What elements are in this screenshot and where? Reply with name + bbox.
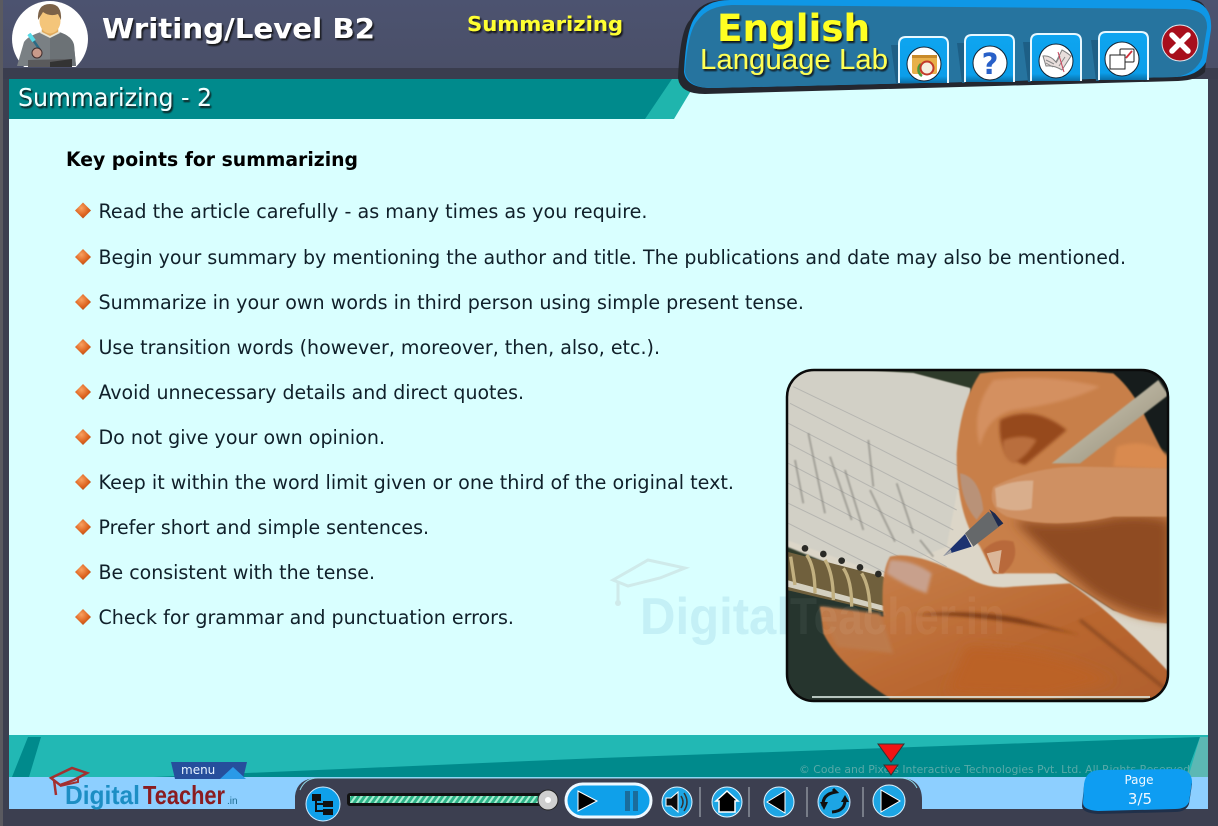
icon: help tab: ? bbox=[982, 47, 998, 81]
section title text: Summarizing - 2 bbox=[18, 83, 212, 112]
panel: English Language Lab bbox=[678, 0, 1211, 94]
content panel bbox=[9, 79, 1208, 735]
logo: Digital Teacher: Digital bbox=[65, 780, 140, 810]
list item 8: Prefer short and simple sentences. bbox=[98, 516, 429, 539]
icon: home button bbox=[712, 787, 742, 817]
list item 7: Keep it within the word limit given or one third of the original text. bbox=[98, 471, 734, 494]
header title: Writing/Level B2 bbox=[102, 12, 375, 45]
icon: next button bbox=[873, 785, 905, 817]
lower hand bbox=[820, 555, 1170, 698]
footer band bbox=[9, 735, 1208, 809]
list item 6: Do not give your own opinion. bbox=[98, 426, 385, 449]
icon: help tab bbox=[957, 35, 1014, 83]
control bar bbox=[295, 778, 922, 826]
pen bbox=[1052, 380, 1168, 463]
thumb bbox=[992, 467, 1170, 523]
icon: close button bbox=[1162, 25, 1198, 61]
key points list bbox=[75, 200, 1126, 629]
upper hand bbox=[957, 370, 1170, 623]
icon: speaker button bbox=[662, 787, 692, 817]
page indicator: Page bbox=[1124, 773, 1154, 787]
icon: open book tab bbox=[1023, 34, 1081, 82]
list item 1: Read the article carefully - as many times as you require. bbox=[98, 200, 648, 223]
icon: window resize tab bbox=[1091, 32, 1148, 81]
list item 4: Use transition words (however, moreover, then, also, etc.). bbox=[98, 336, 660, 359]
watermark bbox=[613, 560, 790, 646]
key points heading: Key points for summarizing bbox=[66, 148, 358, 171]
play and pause button bbox=[566, 784, 651, 817]
photo: hand writing in a spiral notebook bbox=[780, 360, 1180, 710]
list item 3: Summarize in your own words in third person using simple present tense. bbox=[98, 291, 804, 314]
list item 5: Avoid unnecessary details and direct quotes. bbox=[98, 381, 524, 404]
paper bbox=[787, 367, 1170, 697]
brand heading: English bbox=[717, 7, 870, 50]
icon: folder clock tab bbox=[891, 37, 948, 83]
icon: back button bbox=[764, 787, 794, 817]
section title bar bbox=[9, 79, 698, 119]
copyright: © Code and Pixels Interactive Technologies Pvt. Ltd. All Rights Reserved bbox=[799, 764, 1190, 776]
red pointer arrows bbox=[878, 744, 904, 775]
header avatar: person writing bbox=[12, 1, 88, 67]
notebook spiral bbox=[788, 552, 884, 612]
header topic: Summarizing bbox=[467, 12, 623, 36]
list item 9: Be consistent with the tense. bbox=[98, 561, 375, 584]
photo watermark overlay: Teacher.in bbox=[790, 588, 1005, 646]
brand subheading: Language Lab bbox=[700, 44, 888, 76]
progress slider bbox=[347, 790, 558, 810]
logo: Digital Teacher: Teacher bbox=[143, 780, 225, 810]
logo: Digital Teacher: .in bbox=[227, 796, 238, 807]
watermark: Digital bbox=[640, 588, 790, 646]
logo: Digital Teacher bbox=[51, 768, 238, 810]
middle finger tip bbox=[983, 540, 1015, 573]
list item 2: Begin your summary by mentioning the author and title. The publications and date may also be mentioned. bbox=[98, 246, 1126, 269]
icon: sitemap button bbox=[306, 787, 340, 821]
page indicator: 3/5 bbox=[1128, 790, 1152, 808]
page indicator bbox=[1082, 769, 1192, 814]
list item 10: Check for grammar and punctuation errors. bbox=[98, 606, 514, 629]
icon: refresh button bbox=[818, 786, 850, 818]
menu tab bbox=[171, 762, 247, 779]
pen barrel tip bbox=[965, 512, 1003, 547]
menu tab: menu bbox=[181, 763, 215, 777]
